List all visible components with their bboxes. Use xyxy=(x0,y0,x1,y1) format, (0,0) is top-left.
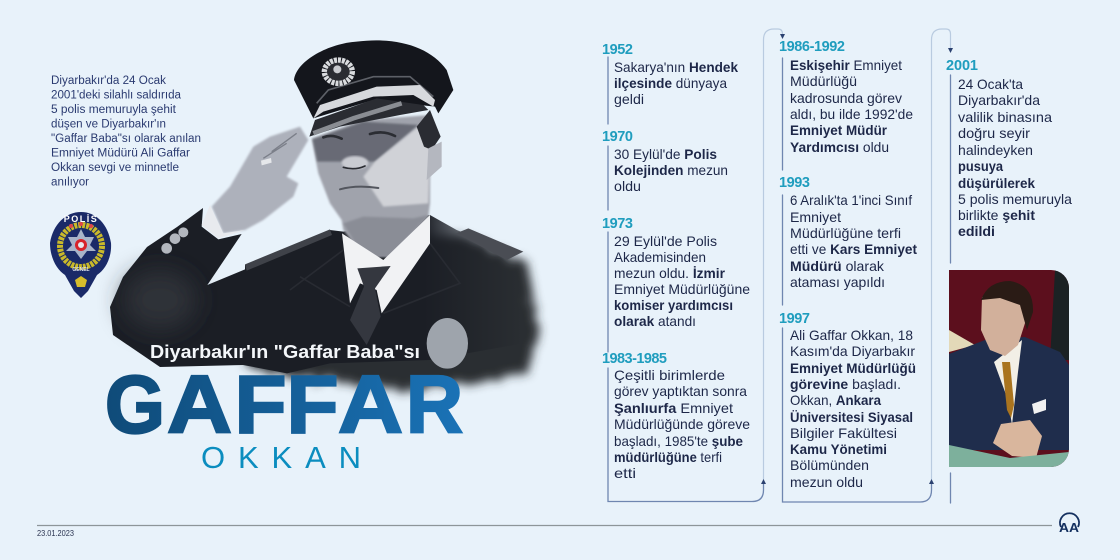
timeline entry: 1993: etti ve Kars Emniyet xyxy=(790,241,917,257)
timeline entry: 2001: düşürülerek xyxy=(958,175,1035,191)
timeline entry: 1997: Bölümünden xyxy=(790,457,869,473)
timeline entry: 1983-1985: Şanlıurfa Emniyet xyxy=(614,400,733,416)
icon: AA logo: AA xyxy=(1059,520,1080,535)
arrowheads xyxy=(761,34,953,484)
timeline entry: 1997: Kasım'da Diyarbakır xyxy=(790,343,915,359)
timeline entry: 1983-1985: müdürlüğüne terfi xyxy=(614,449,722,465)
timeline entry: 1986-1992: 1986-1992 xyxy=(779,39,845,55)
uniform fade xyxy=(243,237,538,390)
title: GAFFAR: R xyxy=(406,360,463,450)
title: GAFFAR: F xyxy=(286,360,338,450)
sleeve shading xyxy=(123,270,197,330)
timeline entry: 1952: ilçesinde dünyaya xyxy=(614,75,727,91)
timeline entry: 1993: ataması yapıldı xyxy=(790,274,885,290)
cap xyxy=(294,40,453,118)
hair xyxy=(981,281,1033,330)
timeline entry: 2001: doğru seyir xyxy=(958,125,1030,141)
cuff xyxy=(202,205,245,238)
intro paragraph xyxy=(51,75,201,188)
hand xyxy=(212,127,308,233)
timeline entry: 1986-1992: Yardımcısı oldu xyxy=(790,139,889,155)
timeline entry: 1983-1985: Çeşitli birimlerde xyxy=(614,367,725,383)
intro paragraph: düşen ve Diyarbakır'ın xyxy=(51,118,166,130)
finger lines xyxy=(263,133,297,158)
footer rule xyxy=(37,524,1052,526)
visor xyxy=(309,98,428,137)
timeline entry: 1993 xyxy=(779,175,917,290)
timeline entry: 1997: Ali Gaffar Okkan, 18 xyxy=(790,327,913,343)
timeline entry: 1986-1992: Emniyet Müdür xyxy=(790,122,888,138)
timeline entry: 2001: Diyarbakır'da xyxy=(958,92,1040,108)
timeline entry: 1993: 1993 xyxy=(779,175,810,191)
timeline entry: 1973: olarak atandı xyxy=(614,313,696,329)
timeline entry: 1970: 30 Eylül'de Polis xyxy=(614,146,717,162)
timeline entry: 1973: 29 Eylül'de Polis xyxy=(614,233,717,249)
title: GAFFAR: F xyxy=(234,360,286,450)
timeline entry: 1997: Emniyet Müdürlüğü xyxy=(790,360,916,376)
buttons xyxy=(161,227,188,254)
timeline entry: 1970: oldu xyxy=(614,178,641,194)
timeline entry: 1986-1992: Eskişehir Emniyet xyxy=(790,57,902,73)
timeline entry: 2001: 2001 xyxy=(946,58,978,74)
icon: police emblem: POLİS xyxy=(64,214,98,224)
timeline entry: 1952 xyxy=(602,42,738,107)
timeline entry: 1983-1985 xyxy=(602,351,750,481)
facial features xyxy=(323,132,395,189)
timeline entry: 2001: valilik binasına xyxy=(958,109,1052,125)
uniform body xyxy=(110,208,523,373)
timeline entry: 1973: 1973 xyxy=(602,216,633,232)
date: 23.01.2023 xyxy=(37,528,74,538)
icon: police emblem: GENEL xyxy=(72,267,90,273)
cap band xyxy=(313,85,435,118)
timeline entry: 1997: Bilgiler Fakültesi xyxy=(790,425,897,441)
pocket square xyxy=(1032,399,1046,414)
icon: police emblem xyxy=(50,212,111,298)
timeline entry: 2001: birlikte şehit xyxy=(958,207,1035,223)
badge xyxy=(427,318,468,369)
suit xyxy=(949,337,1069,450)
timeline entry: 1970 xyxy=(602,129,728,194)
timeline entry: 1973: mezun oldu. İzmir xyxy=(614,265,726,281)
timeline entry: 1997: görevine başladı. xyxy=(790,376,901,392)
timeline entry: 1970: 1970 xyxy=(602,129,633,145)
timeline entry: 1952: Sakarya'nın Hendek xyxy=(614,59,738,75)
timeline entry: 1993: Müdürü olarak xyxy=(790,258,885,274)
hands xyxy=(993,420,1042,458)
timeline entry: 1983-1985: başladı, 1985'te şube xyxy=(614,433,743,449)
timeline entry: 1983-1985: Müdürlüğünde göreve xyxy=(614,416,750,432)
shirt and tie xyxy=(994,340,1022,425)
shirt xyxy=(342,215,430,313)
intro paragraph: Okkan sevgi ve minnetle xyxy=(51,162,179,174)
intro paragraph: 2001'deki silahlı saldırıda xyxy=(51,90,182,102)
cap cord xyxy=(317,77,433,103)
face xyxy=(981,296,1026,356)
timeline entry: 1952: geldi xyxy=(614,91,644,107)
intro paragraph: "Gaffar Baba"sı olarak anılan xyxy=(51,133,201,145)
photo: portrait in suit xyxy=(949,270,1069,467)
intro paragraph: anılıyor xyxy=(51,176,89,188)
timeline entry: 2001: 24 Ocak'ta xyxy=(958,76,1023,92)
timeline connectors xyxy=(608,29,950,503)
tie xyxy=(350,266,391,345)
shoulder boards xyxy=(245,228,523,271)
intro paragraph: 5 polis memuruyla şehit xyxy=(51,104,177,116)
timeline entry: 1983-1985: 1983-1985 xyxy=(602,351,667,367)
timeline entry: 1997 xyxy=(779,311,916,490)
neck shadow xyxy=(343,215,428,257)
title: OKKAN: OKKAN xyxy=(201,440,361,475)
neck and face xyxy=(312,115,430,257)
hair xyxy=(417,110,441,150)
timeline entry: 1993: Emniyet xyxy=(790,209,841,225)
lapel lines xyxy=(290,243,460,313)
timeline entry: 1973: Emniyet Müdürlüğüne xyxy=(614,281,750,297)
title: GAFFAR xyxy=(105,360,463,450)
title: GAFFAR: G xyxy=(105,360,165,450)
timeline entry: 2001: edildi xyxy=(958,223,995,239)
timeline entry: 1997: Okkan, Ankara xyxy=(790,392,881,408)
timeline entry: 1952: 1952 xyxy=(602,42,633,58)
nose xyxy=(342,156,368,169)
timeline entry: 1973: komiser yardımcısı xyxy=(614,297,733,313)
cap emblem xyxy=(324,60,352,83)
timeline entry: 2001: pusuya xyxy=(958,158,1003,174)
timeline entry: 1983-1985: görev yaptıktan sonra xyxy=(614,383,747,399)
timeline entry: 1983-1985: etti xyxy=(614,465,636,481)
icon: AA logo xyxy=(1059,513,1080,535)
timeline entry: 1986-1992: kadrosunda görev xyxy=(790,90,902,106)
intro paragraph: Diyarbakır'da 24 Ocak xyxy=(51,75,166,87)
timeline entry: 1973: Akademisinden xyxy=(614,249,706,265)
timeline entry: 1973 xyxy=(602,216,750,329)
timeline entry: 1986-1992: aldı, bu ilde 1992'de xyxy=(790,106,913,122)
table xyxy=(949,445,1069,467)
timeline entry: 2001 xyxy=(946,58,1072,239)
photo: saluting officer xyxy=(110,40,538,390)
timeline entry: 1970: Kolejinden mezun xyxy=(614,162,728,178)
timeline entry: 1986-1992: Müdürlüğü xyxy=(790,73,857,89)
title: GAFFAR: A xyxy=(167,360,232,450)
title: GAFFAR: A xyxy=(338,360,403,450)
ring xyxy=(261,158,272,165)
timeline entry: 1993: Müdürlüğüne terfi xyxy=(790,225,901,241)
timeline entry: 1997: mezun oldu xyxy=(790,474,863,490)
subtitle: Diyarbakır'ın "Gaffar Baba"sı xyxy=(150,342,420,362)
intro paragraph: Emniyet Müdürü Ali Gaffar xyxy=(51,148,190,160)
timeline entry: 1986-1992 xyxy=(779,39,913,155)
ear xyxy=(427,142,442,180)
timeline entry: 1997: Kamu Yönetimi xyxy=(790,441,887,457)
timeline entry: 2001: 5 polis memuruyla xyxy=(958,191,1072,207)
timeline entry: 2001: halindeyken xyxy=(958,142,1033,158)
timeline entry: 1993: 6 Aralık'ta 1'inci Sınıf xyxy=(790,192,912,208)
timeline entry: 1997: Üniversitesi Siyasal xyxy=(790,409,913,425)
timeline entry: 1997: 1997 xyxy=(779,311,810,327)
